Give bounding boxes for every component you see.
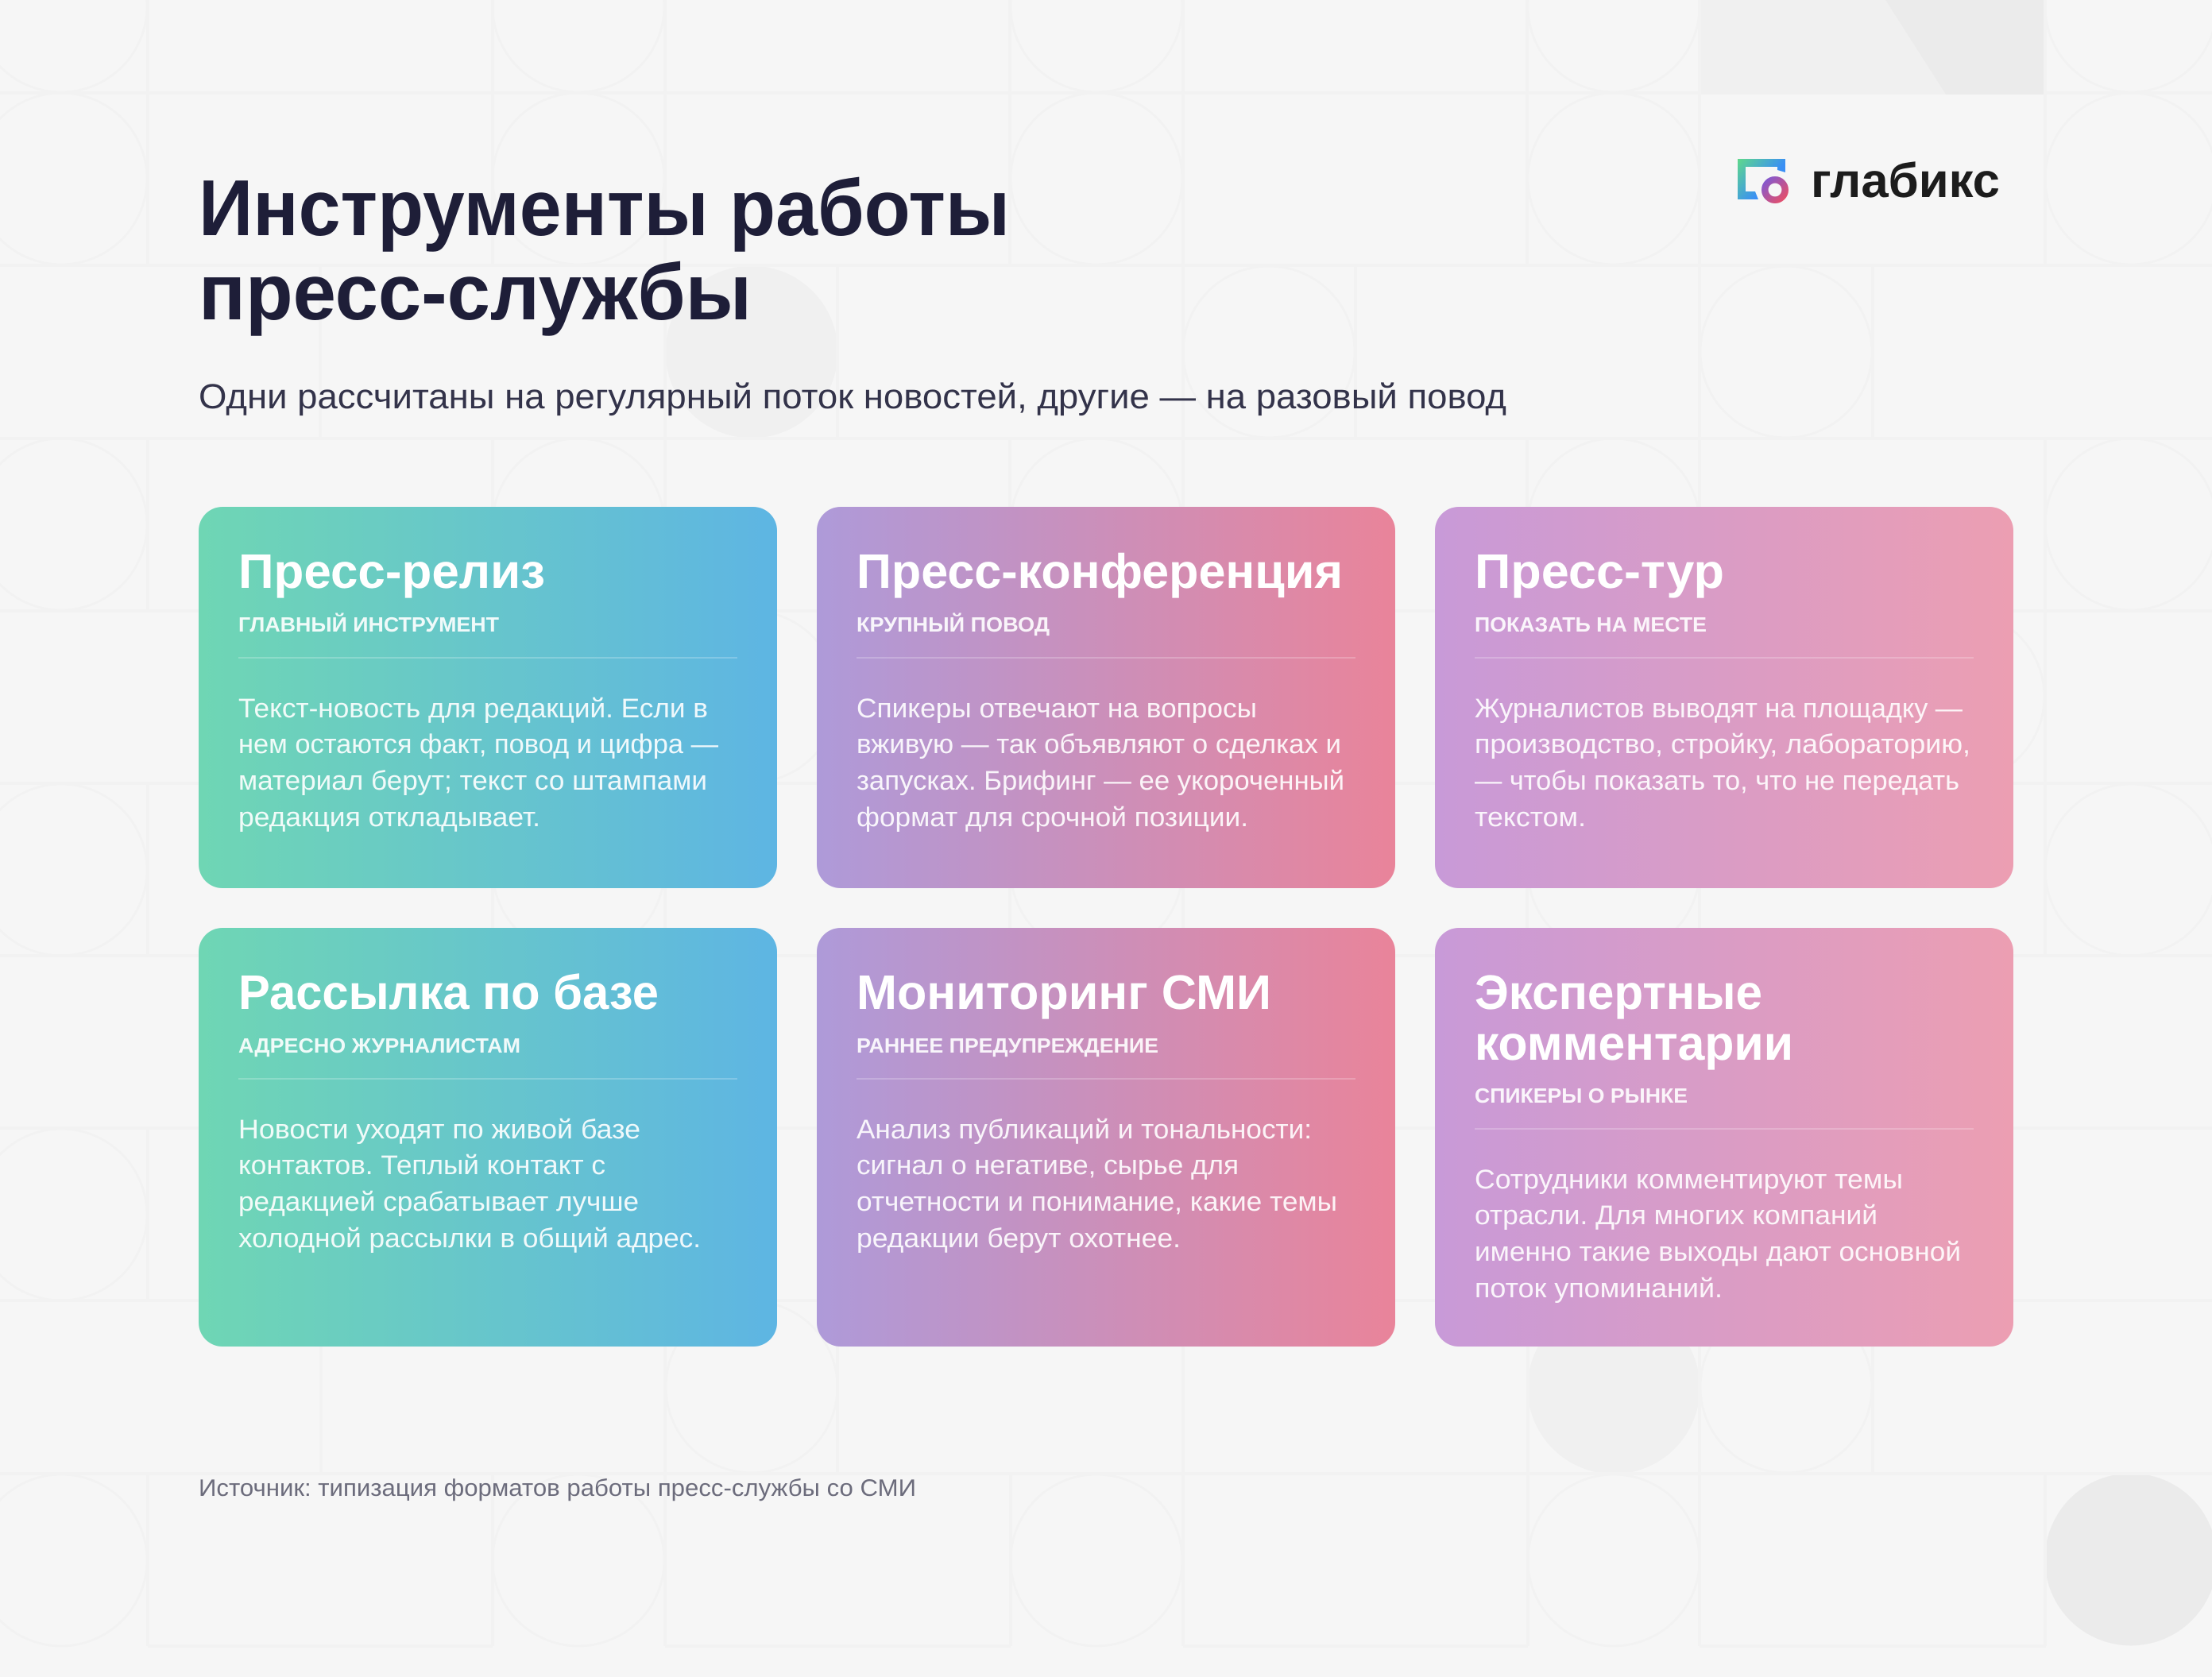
icon: logo mark — [1738, 159, 1785, 200]
card heading: Пресс-релиз — [238, 544, 545, 598]
card heading: Экспертные — [1475, 965, 1762, 1019]
card body text — [238, 694, 718, 833]
card tag: АДРЕСНО ЖУРНАЛИСТАМ — [238, 1034, 520, 1057]
card body text: Новости уходят по живой базе — [238, 1115, 640, 1145]
panel: mailing list — [199, 928, 777, 1347]
card body text: Спикеры отвечают на вопросы — [857, 694, 1257, 724]
card body text — [857, 1115, 1337, 1254]
card body text: формат для срочной позиции. — [857, 802, 1248, 833]
panel: media monitoring — [817, 928, 1395, 1347]
panel: press conference — [817, 507, 1395, 888]
card body text: отрасли. Для многих компаний — [1475, 1200, 1877, 1231]
card heading: Рассылка по базе — [238, 965, 659, 1019]
card body text: отчетности и понимание, какие темы — [857, 1187, 1337, 1217]
card body text: — чтобы показать то, что не передать — [1475, 766, 1959, 796]
card tag: ГЛАВНЫЙ ИНСТРУМЕНТ — [238, 612, 499, 636]
card body text: редакцией срабатывает лучше — [238, 1187, 639, 1217]
card body text: именно такие выходы дают основной — [1475, 1237, 1961, 1267]
source note: Источник: типизация форматов работы пресс-службы со СМИ — [199, 1475, 916, 1501]
card body text: редакции берут охотнее. — [857, 1223, 1181, 1254]
panel: expert comments — [1435, 928, 2013, 1347]
subtitle: Одни рассчитаны на регулярный поток новостей, другие — на разовый повод — [199, 377, 1506, 416]
card body text: Сотрудники комментируют темы — [1475, 1165, 1903, 1195]
title — [199, 164, 1010, 337]
card heading: Пресс-тур — [1475, 544, 1724, 598]
card tag: РАННЕЕ ПРЕДУПРЕЖДЕНИЕ — [857, 1034, 1158, 1057]
card body text: редакция откладывает. — [238, 802, 540, 833]
card heading — [1475, 965, 1793, 1070]
card body text: Анализ публикаций и тональности: — [857, 1115, 1312, 1145]
card body text: нем остаются факт, повод и цифра — — [238, 729, 718, 759]
logo wordmark: глабикс — [1811, 153, 2000, 207]
card body text: Журналистов выводят на площадку — — [1475, 694, 1963, 724]
card heading: Пресс-конференция — [857, 544, 1343, 598]
card heading: комментарии — [1475, 1016, 1793, 1070]
card body text: вживую — так объявляют о сделках и — [857, 729, 1341, 759]
card body text: производство, стройку, лабораторию, — [1475, 729, 1970, 759]
title: Инструменты работы — [199, 164, 1010, 253]
card body text: холодной рассылки в общий адрес. — [238, 1223, 701, 1254]
title: пресс-службы — [199, 248, 752, 337]
card body text: Текст-новость для редакций. Если в — [238, 694, 708, 724]
card tag: СПИКЕРЫ О РЫНКЕ — [1475, 1084, 1688, 1107]
card body text: поток упоминаний. — [1475, 1273, 1723, 1304]
logo — [1738, 153, 2000, 207]
card tag: КРУПНЫЙ ПОВОД — [857, 612, 1050, 636]
card body text — [238, 1115, 701, 1254]
card body text: запусках. Брифинг — ее укороченный — [857, 766, 1344, 796]
card body text: сигнал о негативе, сырье для — [857, 1150, 1239, 1180]
card body text: материал берут; текст со штампами — [238, 766, 707, 796]
card body text: контактов. Теплый контакт с — [238, 1150, 605, 1180]
card body text — [1475, 694, 1970, 833]
card body text: текстом. — [1475, 802, 1586, 833]
card tag: ПОКАЗАТЬ НА МЕСТЕ — [1475, 612, 1707, 636]
panel: press release — [199, 507, 777, 888]
panel: press tour — [1435, 507, 2013, 888]
card heading: Мониторинг СМИ — [857, 965, 1271, 1019]
card body text — [857, 694, 1344, 833]
card body text — [1475, 1165, 1961, 1304]
